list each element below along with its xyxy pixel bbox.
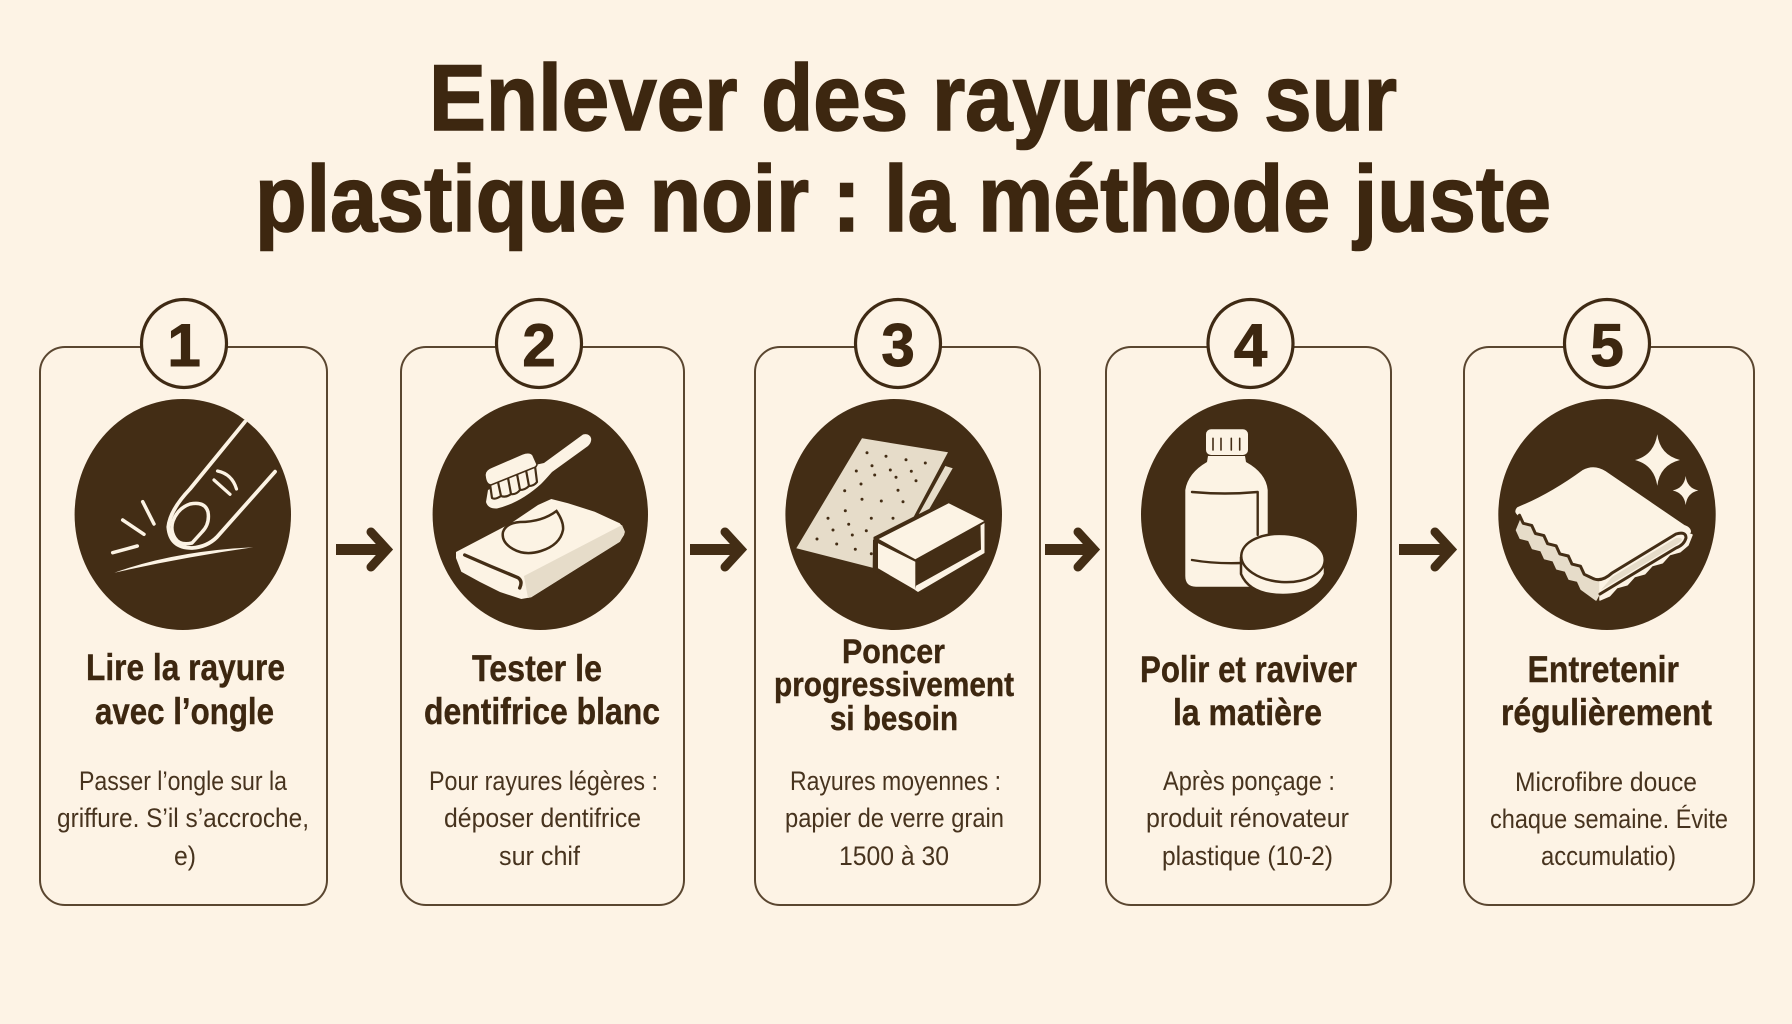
heading: Entretenir bbox=[1528, 649, 1679, 690]
body text: sur chif bbox=[499, 841, 580, 871]
body text bbox=[785, 766, 1004, 871]
panel: step 2 bbox=[401, 300, 684, 905]
heading: Lire la rayure bbox=[86, 647, 285, 688]
heading: avec l’ongle bbox=[95, 691, 274, 732]
body text: Après ponçage : bbox=[1163, 766, 1335, 796]
icon: fingernail on scratch bbox=[75, 399, 291, 630]
heading bbox=[1501, 649, 1712, 733]
heading bbox=[424, 648, 660, 732]
heading: régulièrement bbox=[1501, 692, 1712, 733]
step number 4 bbox=[1208, 300, 1293, 388]
step number 3 bbox=[856, 300, 940, 388]
step number 5 bbox=[1564, 300, 1650, 388]
body text: produit rénovateur bbox=[1146, 803, 1349, 833]
body text: déposer dentifrice bbox=[444, 803, 641, 833]
heading bbox=[1140, 649, 1357, 733]
step number 3: 3 bbox=[881, 312, 915, 379]
arrow 1 to 2 bbox=[336, 532, 387, 567]
title: Enlever des rayures sur bbox=[429, 45, 1397, 150]
body text: plastique (10-2) bbox=[1162, 841, 1333, 871]
body text bbox=[1490, 767, 1728, 871]
body text: Passer l’ongle sur la bbox=[79, 766, 288, 796]
body text: griffure. S’il s’accroche, bbox=[57, 803, 309, 833]
step number 1: 1 bbox=[167, 312, 201, 379]
body text: 1500 à 30 bbox=[839, 841, 949, 871]
icon: toothbrush and cloth bbox=[433, 399, 648, 630]
body text: accumulatio) bbox=[1541, 841, 1676, 871]
heading bbox=[774, 633, 1014, 738]
step number 4: 4 bbox=[1234, 312, 1268, 379]
heading: progressivement bbox=[774, 666, 1014, 704]
arrow 3 to 4 bbox=[1045, 532, 1094, 567]
step number 5: 5 bbox=[1590, 312, 1624, 379]
icon: bottle and polish tin bbox=[1141, 399, 1357, 630]
body text bbox=[1146, 766, 1349, 871]
step number 1 bbox=[142, 300, 226, 388]
panel: step 3 bbox=[755, 300, 1040, 905]
body text: papier de verre grain bbox=[785, 803, 1004, 833]
body text bbox=[57, 766, 309, 871]
heading: Poncer bbox=[842, 633, 945, 671]
step number 2 bbox=[496, 300, 582, 388]
body text: chaque semaine. Évite bbox=[1490, 804, 1728, 834]
arrow 2 to 3 bbox=[690, 532, 741, 567]
arrow 4 to 5 bbox=[1399, 532, 1451, 567]
heading bbox=[86, 647, 285, 732]
title bbox=[255, 45, 1551, 251]
heading: dentifrice blanc bbox=[424, 691, 660, 732]
panel: step 5 bbox=[1464, 300, 1754, 905]
heading: si besoin bbox=[830, 700, 958, 738]
heading: Polir et raviver bbox=[1140, 649, 1357, 690]
panel: step 4 bbox=[1106, 300, 1391, 905]
body text bbox=[429, 766, 658, 871]
heading: Tester le bbox=[472, 648, 602, 689]
body text: Pour rayures légères : bbox=[429, 766, 658, 796]
body text: e) bbox=[174, 841, 196, 871]
step number 2: 2 bbox=[522, 312, 556, 379]
body text: Microfibre douce bbox=[1515, 767, 1697, 797]
icon: microfibre cloth and sparkles bbox=[1498, 399, 1716, 630]
heading: la matière bbox=[1173, 692, 1322, 733]
panel: step 1 bbox=[40, 300, 327, 905]
body text: Rayures moyennes : bbox=[790, 766, 1001, 796]
icon: sandpaper and block bbox=[785, 399, 1002, 630]
title: plastique noir : la méthode juste bbox=[255, 146, 1551, 251]
